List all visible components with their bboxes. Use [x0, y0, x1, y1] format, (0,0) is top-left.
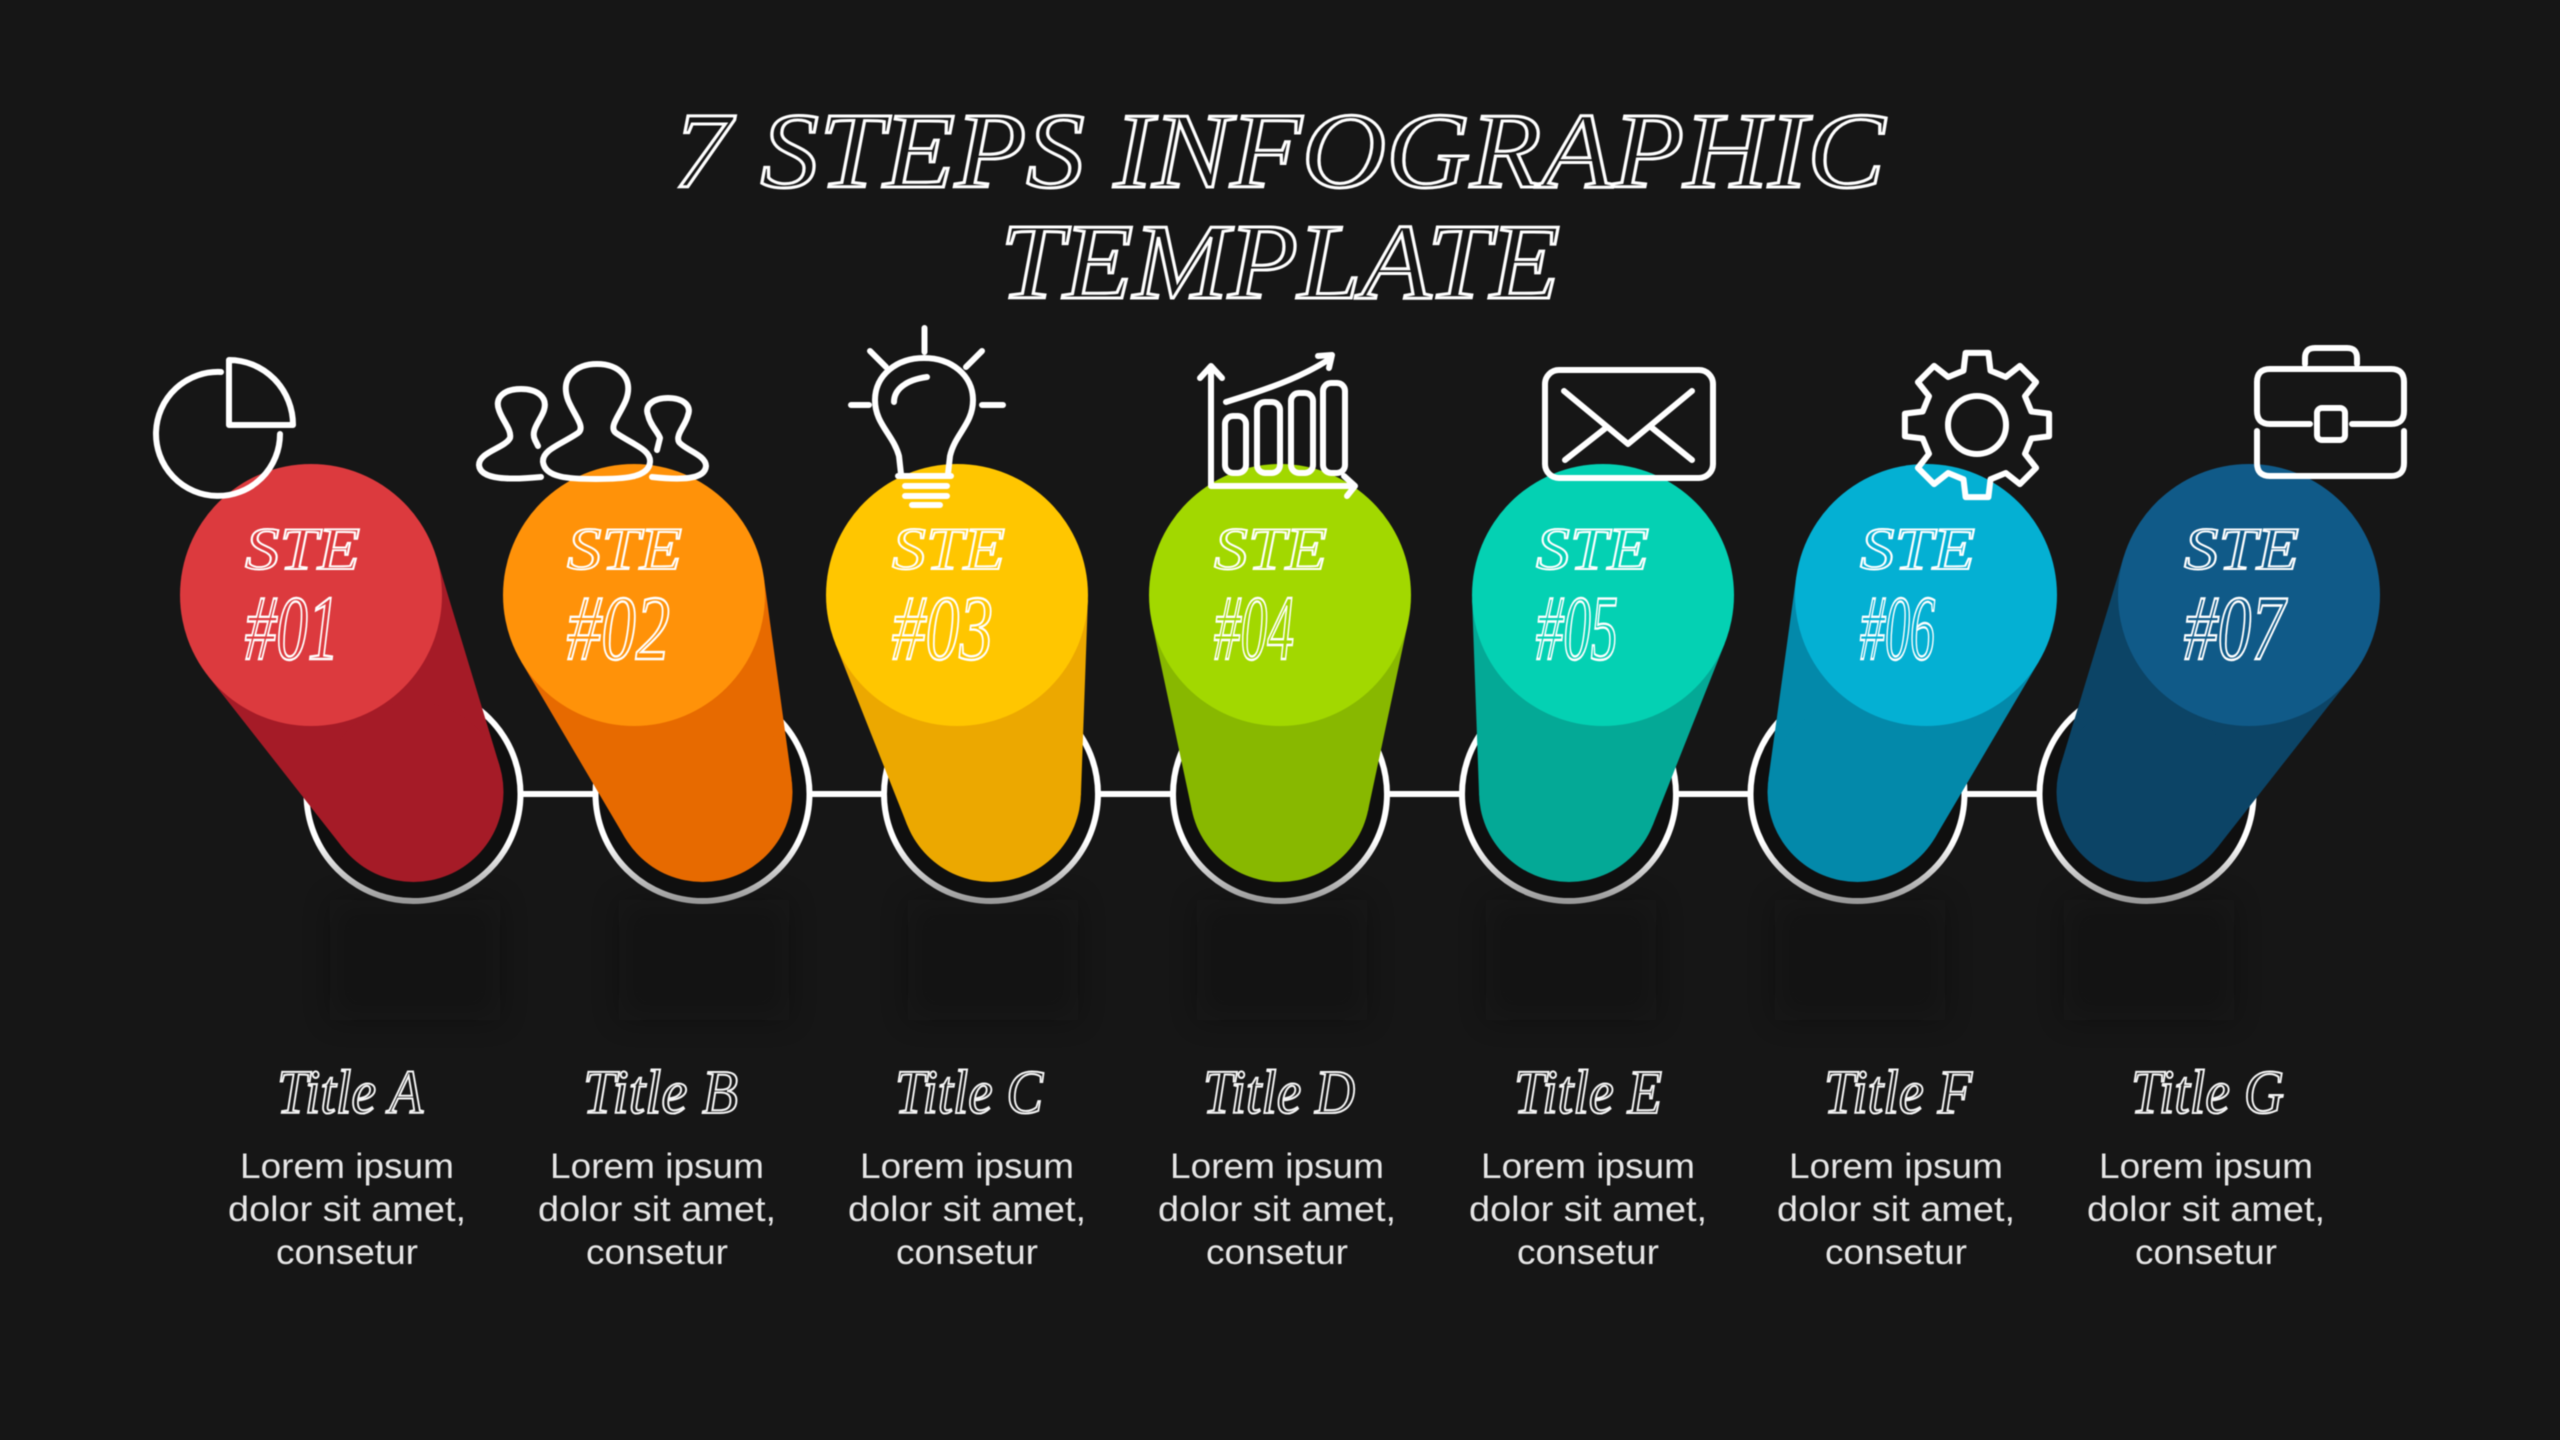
step 2 label: STE [567, 516, 682, 582]
text block G: Title G [2131, 1059, 2284, 1127]
text block G: dolor sit amet, [2087, 1190, 2325, 1229]
text block B [538, 1059, 776, 1272]
capsule 1 [180, 464, 504, 882]
step 6 label: STE [1860, 516, 1975, 582]
step 1 [156, 360, 504, 882]
icon: gear [1905, 353, 2049, 497]
icon: pie chart [156, 360, 293, 496]
icon: briefcase [2257, 348, 2404, 476]
step 5 label: STE [1536, 516, 1649, 582]
text block F: dolor sit amet, [1777, 1190, 2015, 1229]
text block D: consetur [1206, 1233, 1348, 1272]
text block E: dolor sit amet, [1469, 1190, 1707, 1229]
text block C: Lorem ipsum [860, 1147, 1074, 1186]
text block A: consetur [276, 1233, 418, 1272]
title [673, 92, 1887, 322]
text block B: Lorem ipsum [550, 1147, 764, 1186]
step 7 [2056, 348, 2404, 882]
text block F [1777, 1059, 2015, 1272]
step 6 [1768, 353, 2057, 882]
title: 7 STEPS INFOGRAPHIC [673, 92, 1887, 211]
capsule 2 [503, 464, 792, 882]
step 6 label: #06 [1860, 577, 1935, 679]
icon: people [479, 364, 706, 479]
step 3 label: STE [892, 516, 1005, 582]
icon: growth chart [1200, 355, 1355, 496]
text block C: consetur [896, 1233, 1038, 1272]
text block D: Lorem ipsum [1170, 1147, 1384, 1186]
text block D [1158, 1059, 1396, 1272]
text block E: Title E [1514, 1059, 1662, 1127]
text block E: consetur [1517, 1233, 1659, 1272]
text block B: consetur [586, 1233, 728, 1272]
text block D: Title D [1203, 1059, 1355, 1127]
step 2 [479, 364, 792, 882]
capsule 5 [1472, 464, 1734, 882]
text block D: dolor sit amet, [1158, 1190, 1396, 1229]
text block C: Title C [895, 1059, 1044, 1127]
text block A: Lorem ipsum [240, 1147, 454, 1186]
step 3 label [892, 516, 1005, 679]
text block A [228, 1059, 466, 1272]
step 2 label [567, 516, 682, 679]
text block C: dolor sit amet, [848, 1190, 1086, 1229]
text block B: dolor sit amet, [538, 1190, 776, 1229]
text block C [848, 1059, 1086, 1272]
text block E [1469, 1059, 1707, 1272]
timeline: connected rings [306, 687, 2254, 1020]
capsule 3 [826, 464, 1088, 882]
text block A: Title A [277, 1059, 424, 1127]
step 6 label [1860, 516, 1975, 679]
step 7 label: #07 [2184, 577, 2288, 679]
step 1 label [245, 516, 360, 679]
step 4 [1149, 355, 1411, 882]
step 4 label: STE [1214, 516, 1327, 582]
step 7 label: STE [2184, 516, 2299, 582]
step 5 label: #05 [1536, 577, 1618, 679]
capsule 6 [1768, 464, 2057, 882]
icon: envelope [1545, 370, 1713, 478]
step 3 label: #03 [892, 577, 993, 679]
step 4 label [1214, 516, 1327, 679]
step 4 label: #04 [1214, 577, 1294, 679]
text block G: Lorem ipsum [2099, 1147, 2313, 1186]
step 1 label: #01 [245, 577, 339, 679]
text block F: consetur [1825, 1233, 1967, 1272]
text block E: Lorem ipsum [1481, 1147, 1695, 1186]
capsule 7 [2056, 464, 2380, 882]
icon: light bulb [851, 328, 1003, 505]
text block F: Lorem ipsum [1789, 1147, 2003, 1186]
step 5 [1472, 370, 1734, 882]
title: TEMPLATE [1000, 203, 1560, 322]
step 1 label: STE [245, 516, 360, 582]
step 2 label: #02 [567, 577, 670, 679]
text block F: Title F [1824, 1059, 1973, 1127]
capsule 4 [1149, 464, 1411, 882]
step 7 label [2184, 516, 2299, 679]
text block G [2087, 1059, 2325, 1272]
step 5 label [1536, 516, 1649, 679]
text block B: Title B [583, 1059, 738, 1127]
text block A: dolor sit amet, [228, 1190, 466, 1229]
step 3 [826, 328, 1088, 882]
text block G: consetur [2135, 1233, 2277, 1272]
